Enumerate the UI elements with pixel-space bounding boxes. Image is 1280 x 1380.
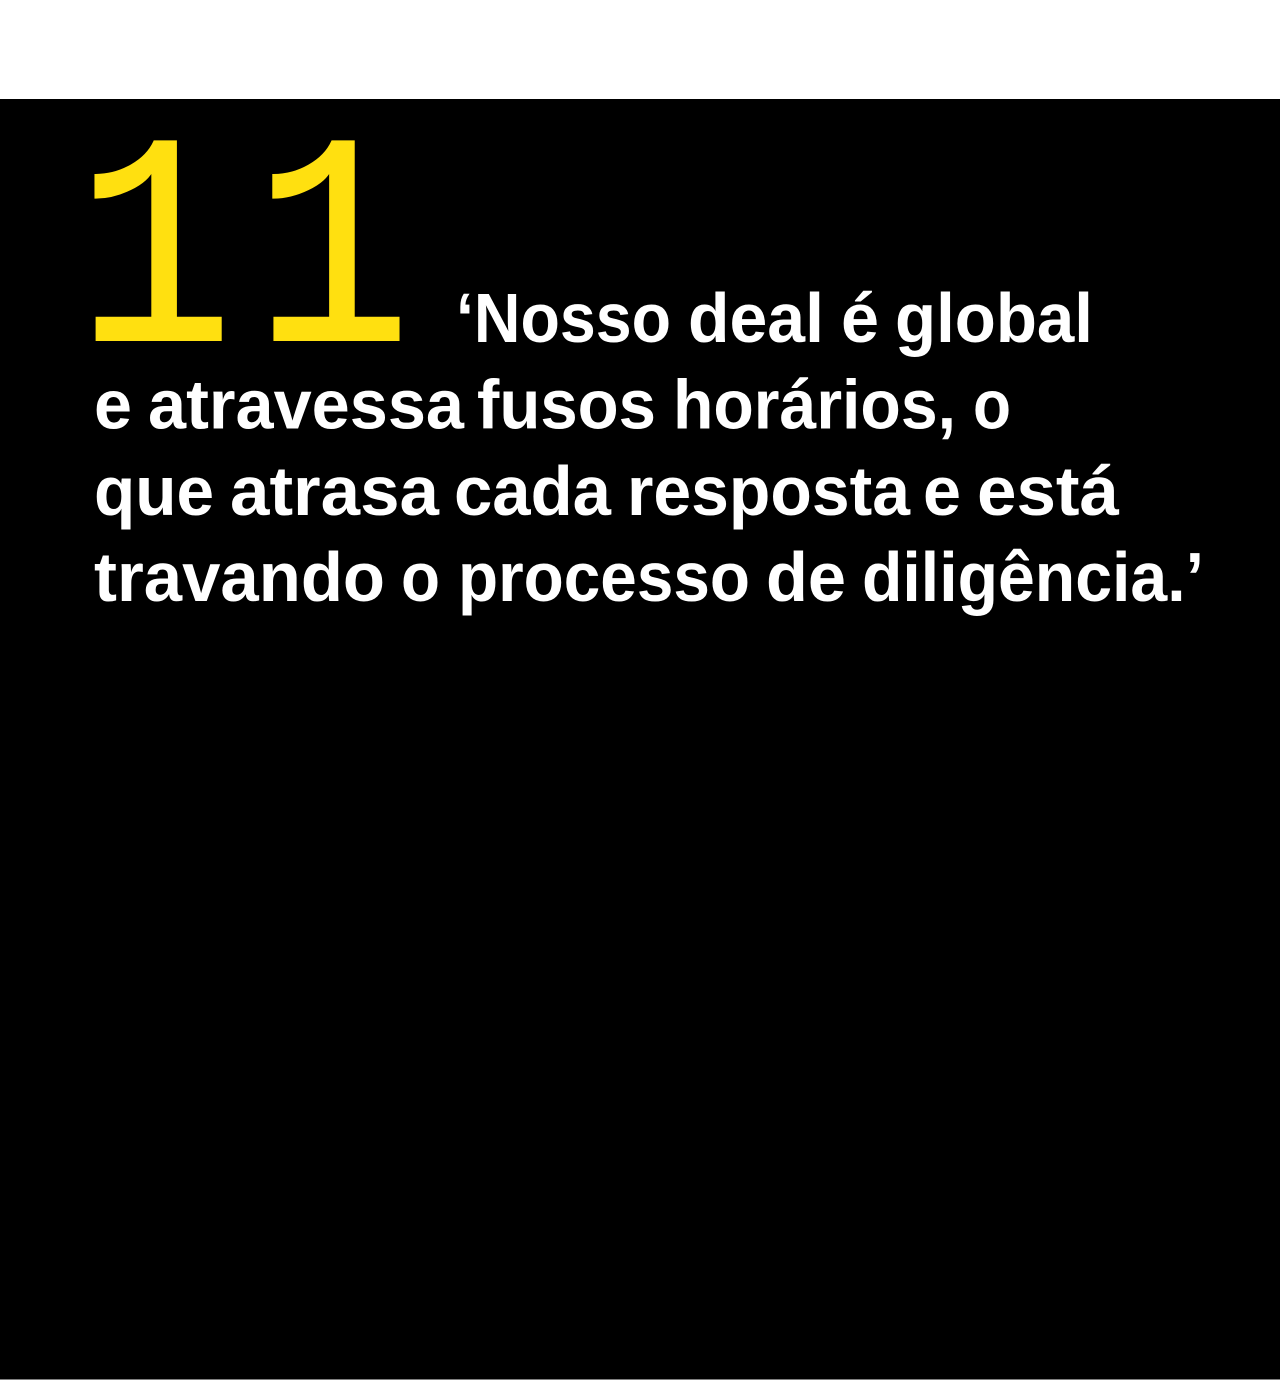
quote text: de [766,538,846,616]
quote text: horários, [673,366,956,444]
quote text: e [923,452,961,530]
number: 11: 11 [77,90,433,430]
quote text: e [94,366,132,444]
quote text: que [94,452,214,530]
quote text: diligência.’ [862,538,1204,616]
quote text: atrasa [230,452,440,530]
quote text: ‘Nosso [456,279,671,357]
quote text: atravessa [148,366,465,444]
quote text: o [973,366,1011,444]
quote text: está [977,452,1120,530]
quote text: cada [454,452,612,530]
quote text: travando [94,538,385,616]
quote text [94,279,1204,616]
quote text: processo [458,538,750,616]
quote text: global [895,279,1093,357]
quote text: o [401,538,440,616]
quote text: fusos [477,366,656,444]
quote text: resposta [627,452,911,530]
quote text: deal [688,279,824,357]
quote text: é [841,279,879,357]
